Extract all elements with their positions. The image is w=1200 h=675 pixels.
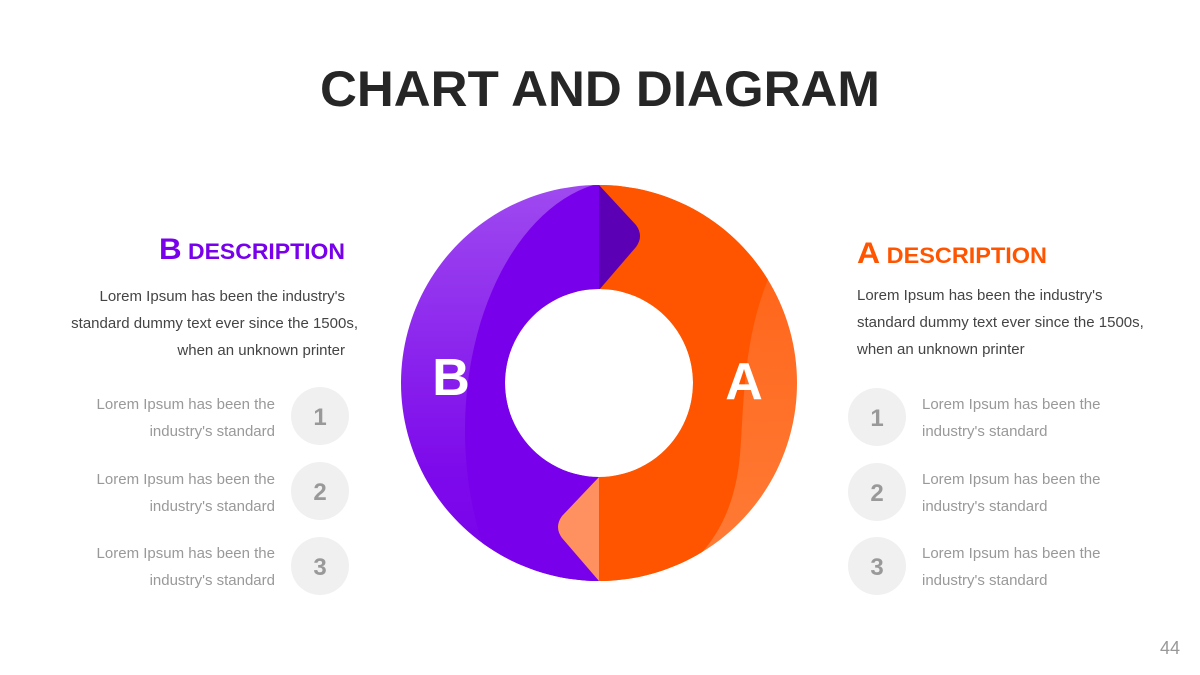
page number: 44 (1160, 638, 1180, 658)
label B: B (432, 349, 470, 407)
paragraph A: standard dummy text ever since the 1500s, (857, 314, 1144, 331)
panel: B description (71, 233, 358, 595)
paragraph A (856, 287, 1144, 358)
list item B3: 3 (313, 554, 327, 581)
list item A1 (848, 388, 1100, 446)
label A: A (725, 353, 763, 411)
list item A2 (848, 463, 1100, 521)
dark purple tab (599, 185, 640, 290)
list item A3: industry's standard (922, 572, 1047, 589)
list item B3: industry's standard (150, 572, 275, 589)
list item A2: Lorem Ipsum has been the (922, 471, 1100, 488)
list item B1: industry's standard (150, 423, 275, 440)
heading A: A DESCRIPTION (857, 237, 1047, 270)
panel: A description (848, 237, 1144, 595)
segment B (401, 185, 599, 581)
list item A1: 1 (870, 405, 884, 432)
heading B: B DESCRIPTION (159, 233, 345, 266)
list item A2: 2 (870, 480, 884, 507)
list item B2: 2 (313, 479, 327, 506)
list item A3: Lorem Ipsum has been the (922, 545, 1100, 562)
list item B1 (97, 387, 349, 445)
list item B2 (97, 462, 349, 520)
segment A (599, 185, 797, 581)
paragraph B (71, 288, 358, 359)
paragraph B: standard dummy text ever since the 1500s, (71, 315, 358, 332)
paragraph B: when an unknown printer (176, 342, 345, 359)
paragraph A: when an unknown printer (856, 341, 1025, 358)
peach tab (558, 477, 599, 581)
list item B1: 1 (313, 404, 327, 431)
list item A3: 3 (870, 554, 884, 581)
list item B3 (97, 537, 349, 595)
list item A1: industry's standard (922, 423, 1047, 440)
list item A2: industry's standard (922, 498, 1047, 515)
list item B3: Lorem Ipsum has been the (97, 545, 275, 562)
list item A1: Lorem Ipsum has been the (922, 396, 1100, 413)
list item B2: industry's standard (150, 498, 275, 515)
list item A3 (848, 537, 1100, 595)
donut chart (401, 185, 797, 581)
paragraph A: Lorem Ipsum has been the industry's (857, 287, 1102, 304)
list item B2: Lorem Ipsum has been the (97, 471, 275, 488)
title: CHART AND DIAGRAM (320, 61, 880, 117)
paragraph B: Lorem Ipsum has been the industry's (100, 288, 345, 305)
list item B1: Lorem Ipsum has been the (97, 396, 275, 413)
